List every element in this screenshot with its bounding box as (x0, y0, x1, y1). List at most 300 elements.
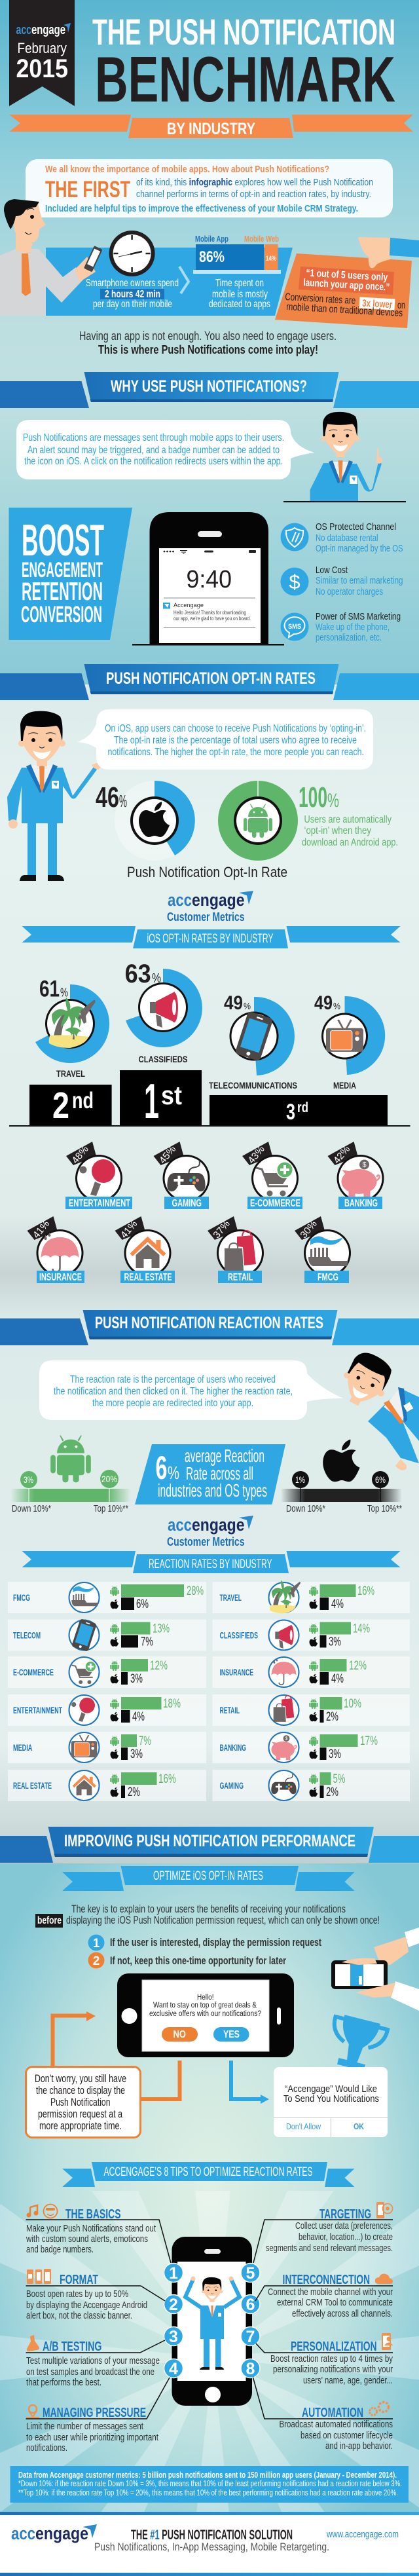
ribbon: optimize iOS opt-in rates: OPTIMIZE iOS OPT-IN RATES (153, 1869, 263, 1883)
stat text: time on apps: dedicated to apps (209, 299, 270, 310)
tip: managing pressure: notifications. (26, 2442, 67, 2454)
phone with notification: 9:40 (186, 566, 232, 593)
tip: targeting: TARGETING (319, 2207, 371, 2222)
speech bubble: definition: An alert sound may be triggered, and a badge number can be added to (27, 445, 280, 456)
tip: the basics (26, 2205, 171, 2263)
speech bubble: reaction rate: the more people are redirected into your app. (92, 1398, 253, 1409)
tip: a/b testing: on test samples and broadcast the one (26, 2366, 155, 2378)
phone with notification: Accengage (173, 602, 204, 608)
orange quote card: launch your app once.” (303, 277, 390, 293)
speech bubble: definition (16, 420, 314, 479)
tip: the basics: Make your Push Notifications stand out (26, 2223, 156, 2234)
tip: format: FORMAT (60, 2273, 98, 2287)
tip: automation: based on customer lifecycle (301, 2430, 393, 2441)
man with smartphone (0, 199, 103, 316)
donut: Android 100%: % (327, 790, 339, 812)
benefit: low cost (280, 565, 403, 597)
stat text: smartphone time: 2 hours 42 min (105, 289, 160, 300)
tip: the basics: with custom sound alerts, emoticons (26, 2233, 148, 2245)
stat text: time on apps: Time spent on (215, 278, 264, 289)
step 1: 1 (93, 1937, 100, 1951)
badge: insurance 41% (27, 1216, 84, 1283)
explanation text (35, 1903, 380, 1928)
card: insurance: 12% (349, 1659, 367, 1673)
card: telecom (8, 1618, 206, 1652)
card: entertainment (8, 1694, 206, 1726)
card: entertainment: 4% (132, 1710, 145, 1724)
iOS permission dialog: OK (354, 2121, 365, 2131)
donut: classifieds 63%: CLASSIFIEDS (139, 1054, 187, 1064)
reassurance box (26, 2067, 140, 2138)
speech bubble: reaction rate (39, 1360, 343, 1420)
arrow: no path up (52, 2011, 96, 2067)
card: FMCG (8, 1582, 206, 1613)
date text (16, 40, 68, 83)
card: banking: 17% (360, 1734, 378, 1748)
badge: banking 42% (327, 1142, 384, 1209)
landscape phone prompt: Want to stay on top of great deals & (153, 2002, 257, 2009)
card: telecom: 7% (141, 1635, 153, 1649)
ribbon: reaction rates by industry: REACTION RATES BY INDUSTRY (149, 1557, 272, 1571)
average reaction callout: 6 (156, 1449, 168, 1486)
podium: 3 (286, 1100, 295, 1125)
card: gaming (212, 1770, 410, 1801)
donut: Android 100%: Users are automatically (304, 814, 392, 825)
step 1 (88, 1935, 321, 1951)
central phone with man (172, 2237, 252, 2406)
benefit: OS protected channel: OS Protected Channel (316, 521, 396, 532)
badge: fmcg 30%: 30% (298, 1218, 319, 1241)
donut: telecommunications 49% (209, 992, 297, 1091)
average reaction callout: Rate across all (186, 1463, 253, 1484)
step 2 (88, 1952, 286, 1969)
tip: automation (253, 2378, 393, 2452)
donut: travel 61%: TRAVEL (56, 1068, 85, 1079)
section banner: opt-in rates: PUSH NOTIFICATION OPT-IN RATES (106, 669, 316, 688)
donut: iOS 46% (96, 781, 195, 861)
donut: travel 61%: 61 (39, 976, 60, 1002)
card: real estate: 2% (128, 1785, 140, 1799)
benefit: power of SMS: Wake up of the phone, (316, 622, 390, 633)
accengage customer metrics logo: Customer Metrics (167, 910, 245, 924)
android range: 3% (24, 1474, 33, 1485)
boost panel: RETENTION (22, 578, 103, 606)
tip: the basics: THE BASICS (65, 2207, 120, 2222)
card: gaming: 5% (333, 1772, 346, 1786)
donut: travel 61% (35, 976, 109, 1079)
ribbon: iOS opt-in by industry: iOS OPT-IN RATES BY INDUSTRY (147, 931, 274, 946)
donut: media 49%: MEDIA (333, 1080, 356, 1091)
accengage logo small (16, 23, 71, 37)
bar: mobile app vs web: 14% (266, 255, 276, 263)
badge: insurance 41%: INSURANCE (39, 1272, 82, 1283)
android range: Top 10%** (94, 1503, 128, 1514)
tip: managing pressure: Limit the number of messages sent (26, 2421, 144, 2432)
speech bubble: definition: the icon on iOS. A click on the notification redirects users within the app. (24, 456, 283, 467)
speech bubble: opt-in: The opt-in rate is the percentage of total users who agree to receive (114, 735, 357, 746)
numbered circles: 1 (169, 2264, 178, 2283)
section banner: why use push notifications (0, 372, 419, 408)
badge: retail 37%: RETAIL (228, 1272, 253, 1283)
card: classifieds: 3% (329, 1635, 341, 1649)
card: banking (212, 1732, 410, 1763)
accengage customer metrics logo 2: engage (192, 1515, 245, 1535)
badge: fmcg 30%: FMCG (318, 1272, 338, 1283)
orange quote card (275, 237, 419, 328)
card: gaming: GAMING (220, 1780, 244, 1791)
card: telecom: 13% (153, 1622, 170, 1636)
podium: st (161, 1081, 182, 1110)
average reaction callout: industries and OS types (158, 1480, 267, 1501)
section banner: reaction rates: PUSH NOTIFICATION REACTION RATES (95, 1314, 323, 1332)
stat text: time on apps: mobile is mostly (212, 289, 268, 300)
benefit: OS protected channel: No database rental (316, 532, 378, 544)
section banner: opt-in rates (0, 664, 419, 700)
card: retail: 2% (326, 1710, 338, 1724)
engage statement: This is where Push Notifications come into play! (98, 343, 318, 356)
speech bubble: reaction rate: the notification and then clicked on it. The higher the reaction rate, (54, 1386, 293, 1397)
orange quote card: 3x lower (362, 298, 393, 310)
bar: mobile app vs web: 86% (199, 248, 225, 266)
donut: Android 100%: ‘opt-in’ when they (304, 825, 371, 836)
accengage logo small: engage (31, 23, 65, 37)
man pointing up (283, 412, 406, 502)
benefit: power of SMS: SMS (288, 623, 301, 631)
apple range: 6% (375, 1474, 386, 1485)
apple range: 1% (295, 1474, 305, 1485)
badge: banking 42%: 42% (331, 1144, 352, 1166)
speech bubble: opt-in (77, 709, 373, 770)
donut: classifieds 63%: 63 (125, 960, 151, 988)
accengage customer metrics logo: acc (168, 890, 192, 910)
card: media: 3% (130, 1747, 143, 1761)
tip: interconnection: INTERCONNECTION (283, 2273, 370, 2287)
average reaction callout: average Reaction (185, 1446, 264, 1466)
step 2: If not, keep this one-time opportunity for later (110, 1954, 286, 1967)
data source box (10, 2466, 409, 2503)
footer logo: acc (11, 2524, 35, 2543)
card: real estate (8, 1770, 206, 1801)
badge: insurance 41%: 41% (31, 1218, 52, 1241)
accengage customer metrics logo (167, 890, 253, 924)
tip: personalization (256, 2333, 393, 2386)
badge: real estate 41%: REAL ESTATE (124, 1272, 172, 1283)
yes button (213, 2027, 249, 2042)
landscape phone prompt (117, 1973, 294, 2057)
ribbon: 8 tips (62, 2162, 355, 2187)
iOS permission dialog (274, 2067, 388, 2137)
tip: format: by displaying the Accengage Android (26, 2300, 147, 2311)
card: travel: TRAVEL (220, 1592, 242, 1603)
numbered circles: 7 (246, 2328, 255, 2346)
tip: a/b testing: Test multiple variations of your message (26, 2355, 160, 2366)
donut: media 49% (314, 992, 385, 1091)
iOS permission dialog: “Accengage” Would Like (285, 2084, 377, 2095)
ribbon: iOS opt-in by industry (22, 926, 401, 948)
card: travel: 16% (357, 1584, 374, 1598)
card: FMCG: FMCG (13, 1592, 30, 1603)
donut: travel 61%: % (60, 986, 68, 999)
card: e-commerce: 3% (130, 1672, 143, 1686)
card: FMCG: 28% (187, 1584, 204, 1598)
card: insurance: 4% (331, 1672, 344, 1686)
tip: a/b testing: A/B TESTING (43, 2340, 102, 2354)
card: retail (212, 1694, 410, 1726)
donut: Android 100%: download an Android app. (302, 837, 398, 848)
card: media: MEDIA (13, 1742, 32, 1753)
card: insurance: INSURANCE (220, 1667, 253, 1677)
no button: NO (173, 2029, 186, 2040)
section banner: improving performance (0, 1827, 419, 1863)
card: gaming: 2% (326, 1785, 338, 1799)
bar: mobile app vs web (193, 234, 281, 274)
chart caption: Push Notification Opt-In Rate (127, 864, 287, 880)
bar: mobile app vs web: Mobile App (195, 234, 228, 244)
card: e-commerce (8, 1656, 206, 1688)
podium (9, 1070, 410, 1129)
numbered circles: 5 (246, 2264, 255, 2283)
badge: e-commerce 43%: 43% (246, 1144, 267, 1166)
card: e-commerce: 12% (150, 1659, 168, 1673)
card: entertainment: ENTERTAINMENT (13, 1705, 62, 1715)
tip: format (26, 2269, 165, 2321)
donut: iOS 46%: % (119, 791, 127, 811)
badge: gaming 45%: GAMING (172, 1198, 202, 1209)
android range: Down 10%* (12, 1503, 51, 1514)
card: entertainment: 18% (163, 1697, 181, 1711)
tip: personalization: users' name, age, gender... (303, 2375, 393, 2386)
donut: media 49%: % (333, 1001, 340, 1012)
numbered circles: 2 (169, 2296, 178, 2314)
engage statement (79, 329, 337, 356)
ribbon: optimize iOS opt-in rates (62, 1866, 355, 1891)
badge: fmcg 30% (295, 1216, 351, 1283)
tip: a/b testing (26, 2335, 165, 2388)
tip: automation: AUTOMATION (302, 2406, 363, 2420)
apple range: Top 10%** (367, 1503, 402, 1514)
badge: gaming 45% (153, 1142, 210, 1209)
date text: February (17, 40, 67, 56)
phone with notification (132, 512, 284, 646)
tip: managing pressure: to each user while prioritizing important (26, 2432, 159, 2443)
arrow: no path from phone (140, 2061, 179, 2099)
yes button: YES (223, 2029, 240, 2040)
badge: retail 37%: 37% (211, 1218, 232, 1241)
donut: iOS 46%: 46 (96, 781, 119, 813)
boost panel: CONVERSION (21, 602, 102, 627)
donut: classifieds 63% (125, 960, 202, 1064)
clock (109, 231, 155, 276)
thumbs-down hand (358, 237, 419, 268)
average reaction callout: % (168, 1463, 179, 1483)
benefit: power of SMS: personalization, etc. (316, 632, 382, 643)
phone with notification: our app, we're glad to have you on board. (173, 616, 251, 622)
card: telecom: TELECOM (13, 1630, 41, 1640)
landscape phone prompt: exclusive offers with our notifications? (149, 2010, 261, 2018)
accengage customer metrics logo 2: Customer Metrics (167, 1535, 245, 1548)
badge: real estate 41% (115, 1216, 175, 1283)
badge: entertainment 48%: 48% (69, 1144, 91, 1166)
donut: classifieds 63%: % (152, 971, 161, 986)
engage statement: Having an app is not enough. You also need to engage users. (79, 329, 337, 343)
reassurance box: permission request at a (38, 2108, 123, 2120)
benefit: low cost: Low Cost (316, 565, 348, 576)
leaning man (334, 1347, 419, 1470)
card: classifieds: 14% (353, 1622, 370, 1636)
iOS permission dialog: Don't Allow (286, 2121, 321, 2131)
reassurance box: the chance to display the (36, 2085, 125, 2097)
numbered circles (164, 2264, 260, 2378)
accengage customer metrics logo 2 (167, 1515, 253, 1548)
badge: e-commerce 43% (242, 1142, 302, 1209)
step 2: 2 (93, 1954, 100, 1968)
small man with arms raised (185, 2277, 240, 2370)
card: classifieds (212, 1619, 410, 1651)
ribbon: reaction rates by industry (22, 1551, 401, 1573)
stat text: smartphone time (86, 278, 179, 310)
hands holding phone (331, 1928, 419, 2011)
badge: e-commerce 43%: E-COMMERCE (250, 1198, 301, 1209)
tip: format: Boost open rates by up to 50% (26, 2288, 128, 2300)
benefit: low cost: $ (289, 570, 301, 593)
card: real estate: REAL ESTATE (13, 1780, 52, 1791)
average reaction callout (135, 1444, 285, 1504)
footer tagline (94, 2528, 329, 2553)
date text: 2015 (16, 54, 68, 83)
title (92, 11, 395, 115)
badge: entertainment 48% (65, 1142, 132, 1209)
intro text panel: We all know the importance of mobile apps. How about Push Notifications? (45, 164, 329, 175)
speech bubble: reaction rate: The reaction rate is the percentage of users who received (70, 1374, 276, 1385)
tip: managing pressure: MANAGING PRESSURE (43, 2406, 146, 2420)
donut: Android 100%: 100 (299, 781, 327, 813)
badge: entertainment 48%: ENTERTAINMENT (69, 1198, 130, 1209)
trophy (325, 2013, 389, 2074)
card: retail: RETAIL (220, 1705, 240, 1715)
tip: the basics: and badge numbers. (26, 2244, 94, 2255)
tip: personalization: PERSONALIZATION (291, 2340, 377, 2354)
section banner: reaction rates (0, 1310, 419, 1345)
intro text panel: THE FIRST (45, 177, 130, 202)
accengage customer metrics logo 2: acc (168, 1515, 192, 1535)
stat text: smartphone time: Smartphone owners spend (86, 278, 179, 289)
section banner: why use push notifications: WHY USE PUSH NOTIFICATIONS? (111, 377, 307, 396)
date ribbon (9, 0, 75, 106)
card: insurance (212, 1656, 410, 1688)
footer tagline: THE #1 PUSH NOTIFICATION SOLUTION (131, 2528, 293, 2543)
step 1: If the user is interested, display the permission request (110, 1936, 321, 1949)
card: classifieds: CLASSIFIEDS (220, 1630, 258, 1640)
card: travel (212, 1580, 410, 1613)
accengage customer metrics logo: engage (192, 890, 245, 910)
numbered circles: 4 (169, 2360, 178, 2378)
tip: managing pressure (26, 2378, 170, 2454)
badge: real estate 41%: 41% (118, 1218, 139, 1241)
boost panel: BOOST (22, 515, 104, 565)
explanation text: before (37, 1915, 62, 1926)
card: travel: 4% (331, 1597, 344, 1611)
card: e-commerce: E-COMMERCE (13, 1667, 54, 1677)
footer tagline: Push Notifications, In-App Messaging, Mobile Retargeting. (94, 2541, 329, 2553)
man presenting, full body (7, 711, 109, 881)
accengage logo small: acc (16, 23, 31, 37)
tip: automation: and in-app behavior. (325, 2440, 393, 2452)
phone with notification: Hello Jessica! Thanks for downloading (173, 610, 246, 616)
by industry ribbon (9, 115, 413, 138)
stat text: smartphone time: per day on their mobile (93, 299, 172, 310)
donut: media 49%: 49 (314, 992, 333, 1014)
intro text panel: of its kind, this infographic explores how well the Push Notification (136, 177, 373, 188)
reassurance box: Push Notification (50, 2097, 110, 2108)
card: banking: BANKING (220, 1742, 246, 1753)
podium: 2 (52, 1085, 69, 1127)
landscape phone prompt: Hello! (197, 1994, 213, 2002)
card: media: 7% (139, 1734, 151, 1748)
benefit: low cost: No operator charges (316, 586, 383, 597)
iOS permission dialog: To Send You Notifications (283, 2094, 379, 2104)
android range (10, 1435, 131, 1514)
chevron arrow (179, 267, 189, 293)
speech bubble: definition: Push Notifications are messages sent through mobile apps to their users. (23, 432, 284, 443)
orange quote card: Conversion rates are (285, 291, 356, 307)
android range: 20% (101, 1474, 117, 1484)
tip: interconnection (255, 2273, 393, 2319)
tip: format: alert box, not the classic banner. (26, 2310, 132, 2321)
stat text: time on apps (209, 278, 270, 310)
intro text panel (26, 159, 393, 217)
card: real estate: 16% (158, 1772, 176, 1786)
by industry ribbon: BY INDUSTRY (167, 120, 255, 138)
apple range: Down 10%* (286, 1503, 325, 1514)
badge: banking 42%: BANKING (344, 1198, 378, 1209)
boost panel (9, 508, 132, 640)
apple range (281, 1440, 402, 1514)
donut: Android 100% (218, 780, 398, 861)
podium: nd (72, 1088, 94, 1113)
footer logo: engage (35, 2524, 88, 2543)
reassurance box: more appropriate time. (39, 2120, 122, 2132)
podium: 1 (144, 1073, 159, 1129)
reassurance box: Don’t worry, you still have (35, 2073, 126, 2085)
card: FMCG: 6% (136, 1597, 149, 1611)
footer url: www.accengage.com (326, 2529, 399, 2540)
badge: retail 37% (208, 1216, 264, 1283)
donut: telecommunications 49%: 49 (224, 992, 243, 1014)
footer (0, 2512, 419, 2576)
podium: rd (297, 1099, 308, 1115)
benefit: power of SMS (280, 611, 401, 643)
bar: mobile app vs web: Mobile Web (244, 234, 279, 244)
numbered circles: 3 (169, 2328, 178, 2346)
donut: telecommunications 49%: TELECOMMUNICATIONS (209, 1080, 297, 1091)
blue stats band (46, 248, 293, 316)
card: retail: 10% (344, 1697, 361, 1711)
orange quote card: on (397, 300, 405, 311)
no button (162, 2027, 198, 2042)
tip: a/b testing: that performs the best. (26, 2377, 101, 2388)
numbered circles: 6 (246, 2296, 255, 2314)
arrow: yes path (231, 2061, 269, 2104)
card: banking: 3% (329, 1747, 341, 1761)
orange quote card: “1 out of 5 users only (306, 268, 388, 283)
benefit: OS protected channel (280, 521, 403, 554)
boost panel: ENGAGEMENT (22, 558, 103, 582)
tip: targeting (253, 2202, 393, 2263)
numbered circles: 8 (246, 2360, 255, 2378)
card: media (8, 1732, 206, 1763)
badge: gaming 45%: 45% (157, 1144, 178, 1166)
intro text panel: channel performs in terms of opt-in and reaction rates, by industry. (136, 189, 371, 200)
